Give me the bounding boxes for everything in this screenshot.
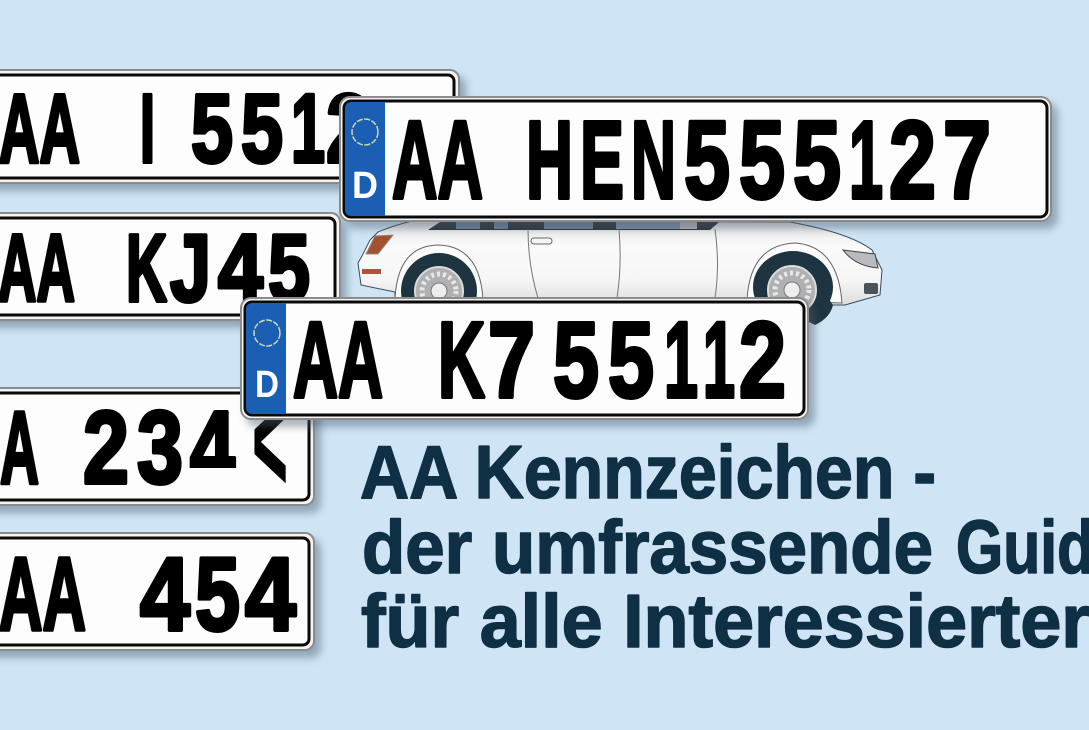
EU band: D [255, 364, 279, 406]
plate: AA K755112 (middle, with EU band): 7 [488, 299, 535, 420]
EU band [246, 303, 286, 414]
plate: A 234 (third left): 2 [83, 390, 129, 505]
plate: AA KJ45 (second left): 4 [218, 215, 263, 322]
plate: AA KJ45 (second left) [0, 213, 340, 322]
car body [358, 221, 882, 305]
plate: AA 454 (bottom left): 5 [195, 537, 240, 653]
plate: AA KJ45 (second left): K [126, 215, 167, 322]
plate: AA HEN555127 (top, with EU band): E [580, 99, 624, 222]
EU band [345, 102, 385, 216]
headlight [843, 250, 878, 268]
plate: AA KJ45 (second left): J [170, 215, 211, 322]
plate: AA I 5512 (top left): I [140, 74, 155, 183]
plate: AA HEN555127 (top, with EU band) [340, 97, 1051, 222]
plate: AA HEN555127 (top, with EU band): 5 [793, 99, 841, 222]
plate: AA K755112 (middle, with EU band): 1 [664, 299, 698, 420]
plate: A 234 (third left): 3 [137, 390, 183, 505]
plate: A 234 (third left): A [0, 390, 39, 505]
plate: AA HEN555127 (top, with EU band): 1 [849, 99, 883, 222]
plate: AA HEN555127 (top, with EU band): H [526, 99, 573, 222]
title: für alle Interessierter [361, 579, 1089, 663]
plate: A 234 (third left): < [252, 354, 288, 524]
plate: AA K755112 (middle, with EU band): K [438, 299, 485, 420]
plate: AA HEN555127 (top, with EU band): 5 [684, 99, 730, 222]
plate: AA I 5512 (top left): 5 [191, 74, 233, 183]
plate: AA I 5512 (top left) [0, 70, 459, 183]
title: der umfrassende [362, 505, 933, 589]
plate: A 234 (third left) [0, 387, 326, 518]
plate: AA K755112 (middle, with EU band): 5 [608, 299, 654, 420]
plate: AA 454 (bottom left): AA [0, 537, 86, 653]
plate: AA I 5512 (top left): 2 [326, 74, 371, 183]
tail light [366, 235, 393, 254]
plate: AA K755112 (middle, with EU band) [241, 298, 808, 420]
plate: AA K755112 (middle, with EU band): 2 [739, 299, 786, 420]
plate: A 234 (third left): 4 [190, 390, 235, 505]
plate: AA K755112 (middle, with EU band): AA [293, 299, 383, 420]
plate: AA HEN555127 (top, with EU band): 7 [943, 99, 991, 222]
rear wheel [395, 245, 483, 300]
windows [428, 222, 719, 230]
plate: AA I 5512 (top left): AA [0, 74, 80, 183]
front wheel [747, 243, 842, 303]
title [360, 430, 1089, 663]
plate: AA HEN555127 (top, with EU band): 5 [739, 99, 785, 222]
plate: AA KJ45 (second left): 5 [268, 215, 310, 322]
plate: AA 454 (bottom left): 4 [140, 537, 190, 653]
door lines [528, 229, 718, 298]
plate: AA 454 (bottom left) [0, 533, 314, 653]
car: white limousine [358, 221, 882, 329]
plate: AA I 5512 (top left): 1 [291, 74, 325, 183]
title: AA Kennzeichen - [360, 430, 936, 514]
EU band: D [352, 165, 378, 207]
plate: AA HEN555127 (top, with EU band): 2 [889, 99, 936, 222]
plate: AA 454 (bottom left): 4 [245, 537, 296, 653]
plate: AA KJ45 (second left): AA [0, 215, 75, 322]
plate: AA I 5512 (top left): 5 [241, 74, 283, 183]
plate: AA HEN555127 (top, with EU band): N [631, 99, 676, 222]
plate: AA K755112 (middle, with EU band): 5 [553, 299, 599, 420]
plate: AA K755112 (middle, with EU band): 1 [703, 299, 735, 420]
plate: AA HEN555127 (top, with EU band): AA [392, 99, 483, 222]
front vent [864, 283, 878, 294]
